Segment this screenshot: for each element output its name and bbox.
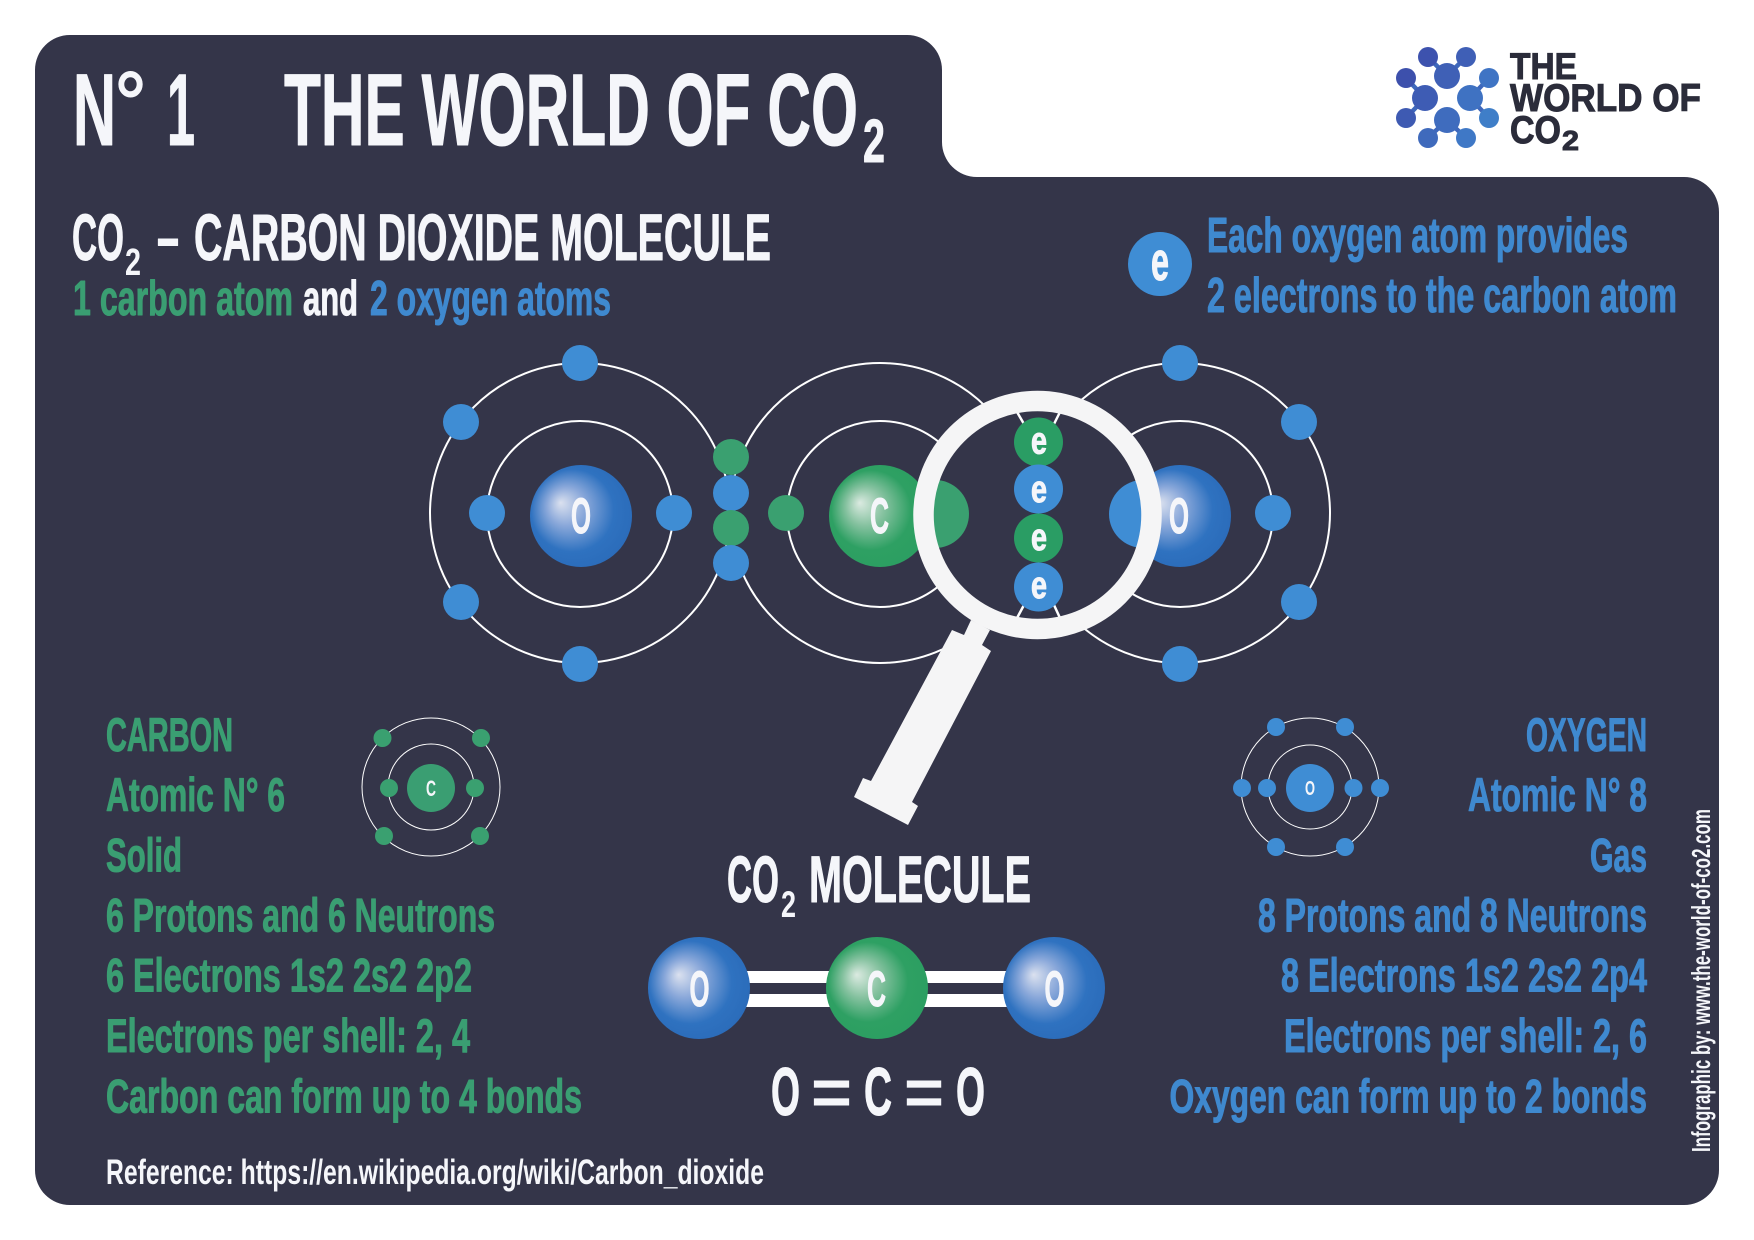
- logo icon: molecule network: [1396, 47, 1499, 148]
- panel: carbon facts: 6 Electrons 1s2 2s2 2p2: [106, 948, 472, 1002]
- panel: carbon facts: 6 Protons and 6 Neutrons: [106, 888, 495, 942]
- icon: small oxygen atom: [1233, 718, 1389, 856]
- electron note text: [1207, 209, 1677, 323]
- diagram: shared electrons between atoms: [430, 345, 1330, 825]
- heading: CO2 molecule: [727, 842, 1031, 925]
- magnified shared electrons: e: [1031, 469, 1047, 511]
- panel: oxygen facts: OXYGEN: [1526, 708, 1647, 761]
- structural formula: [771, 1054, 985, 1130]
- atom: carbon: C: [870, 488, 889, 544]
- magnified shared electrons: e: [1031, 517, 1047, 559]
- logo wordmark: CO: [1510, 109, 1561, 152]
- molecule model: O=C=O balls and double bonds: [648, 937, 1105, 1039]
- title: 1: [167, 53, 195, 167]
- title: 2: [863, 107, 885, 175]
- panel: carbon facts: Solid: [106, 828, 182, 882]
- icon: small carbon atom: [362, 718, 500, 856]
- subheading: atom counts: [73, 272, 611, 326]
- structural formula: =: [904, 1055, 944, 1129]
- logo wordmark: THE: [1510, 46, 1577, 87]
- subheading: atom counts: 1 carbon atom: [73, 272, 293, 326]
- heading: CO2 carbon dioxide molecule: –: [157, 200, 179, 274]
- heading: CO2 carbon dioxide molecule: CO: [72, 200, 124, 274]
- ball: right oxygen: O: [1044, 961, 1064, 1017]
- shared electrons: left bond: [713, 439, 749, 581]
- atom: left oxygen: [430, 345, 730, 682]
- panel: carbon facts: Carbon can form up to 4 bonds: [106, 1070, 582, 1122]
- title: °: [115, 54, 146, 150]
- panel: carbon facts: CARBON: [106, 708, 233, 761]
- atom: carbon: [730, 363, 1030, 663]
- structural formula: O: [771, 1054, 800, 1130]
- heading: CO2 carbon dioxide molecule: [72, 200, 771, 284]
- ball: carbon: C: [867, 961, 886, 1017]
- reference line: Reference: https://en.wikipedia.org/wiki/Carbon_dioxide: [106, 1153, 764, 1192]
- logo wordmark: 2: [1562, 125, 1579, 156]
- magnified shared electrons: [1014, 418, 1063, 612]
- callout: electron note: [1128, 209, 1677, 323]
- ball: left oxygen: [648, 937, 750, 1039]
- vertical credit: Infographic by: www.the-world-of-co2.com: [1686, 809, 1716, 1152]
- structural formula: C: [864, 1054, 892, 1130]
- title: THE WORLD OF CO: [284, 53, 858, 167]
- atom: right oxygen: O: [1169, 488, 1189, 544]
- title: [73, 53, 885, 175]
- icon: electron: [1128, 230, 1192, 296]
- panel: carbon facts: [106, 708, 582, 1122]
- atom: left oxygen: O: [571, 488, 591, 544]
- subheading: atom counts: 2 oxygen atoms: [370, 272, 611, 326]
- structural formula: O: [956, 1054, 985, 1130]
- double bonds: [740, 971, 1010, 1007]
- panel: oxygen facts: Gas: [1590, 828, 1647, 882]
- ball: carbon: [826, 937, 928, 1039]
- panel: carbon facts: Electrons per shell: 2, 4: [106, 1009, 470, 1062]
- magnifier lens interior: [934, 413, 1142, 617]
- ball: left oxygen: O: [690, 961, 710, 1017]
- icon: electron: e: [1151, 230, 1169, 292]
- heading: CO2 carbon dioxide molecule: CARBON DIOXIDE MOLECULE: [194, 200, 771, 274]
- atom: right oxygen: [1030, 345, 1330, 682]
- structural formula: =: [811, 1055, 852, 1129]
- heading: CO2 molecule: 2: [781, 884, 796, 925]
- magnified shared electrons: e: [1031, 565, 1047, 607]
- heading: CO2 molecule: CO: [727, 842, 779, 916]
- magnifier handle: [854, 620, 991, 825]
- logo: The World of CO2: [1396, 46, 1701, 156]
- magnifying glass: [854, 401, 1177, 825]
- heading: CO2 carbon dioxide molecule: 2: [125, 242, 141, 284]
- ball: right oxygen: [1003, 937, 1105, 1039]
- title: N: [73, 53, 116, 167]
- panel: carbon facts: Atomic N° 6: [106, 768, 285, 821]
- icon: small carbon atom: C: [426, 776, 436, 801]
- icon: small oxygen atom: O: [1305, 778, 1315, 800]
- magnified shared electrons: e: [1031, 420, 1047, 462]
- subheading: atom counts: and: [303, 272, 358, 326]
- heading: CO2 molecule: MOLECULE: [809, 842, 1031, 916]
- panel: oxygen facts: [1170, 708, 1647, 1122]
- panel: oxygen facts: Atomic N° 8: [1468, 768, 1647, 821]
- logo wordmark: [1510, 46, 1701, 156]
- logo wordmark: WORLD OF: [1510, 77, 1701, 120]
- magnifier ring: [924, 401, 1152, 629]
